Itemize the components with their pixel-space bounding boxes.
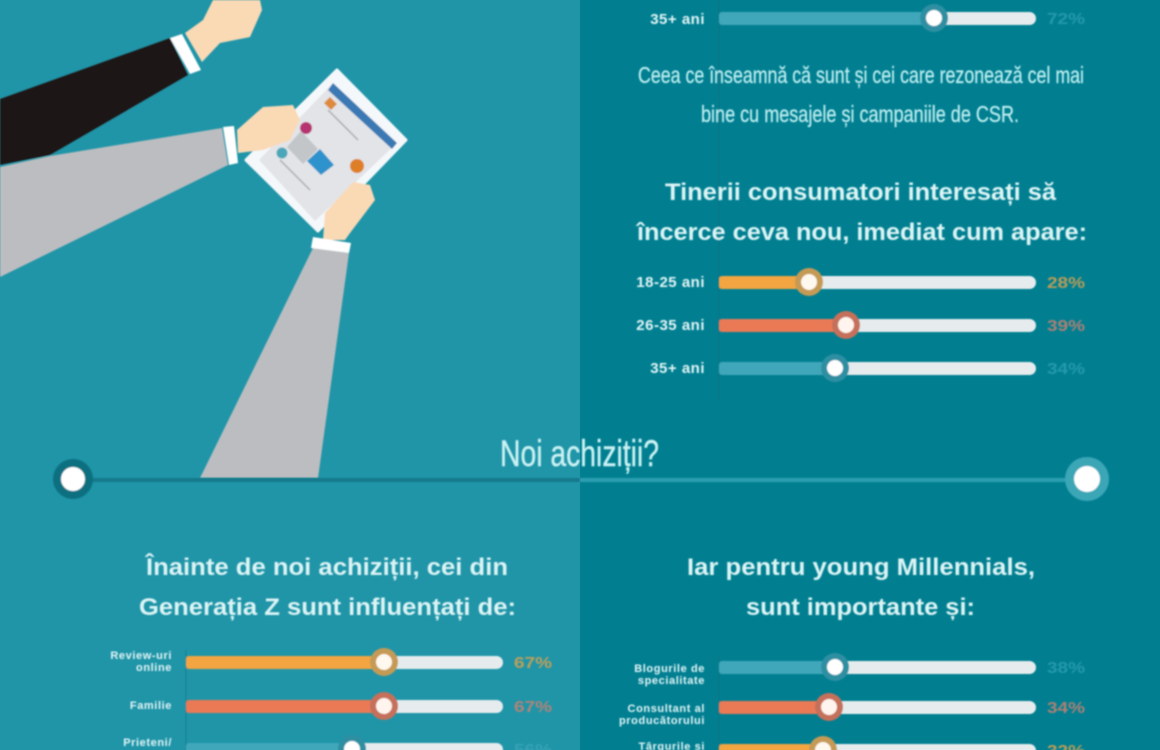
heading: young Millennials: sunt importante și:	[746, 594, 975, 621]
heading: young Millennials	[687, 554, 1035, 621]
bar: Târgurile și 32%	[638, 736, 1085, 750]
bar: 35+ ani 34%: 34%	[1047, 361, 1085, 378]
heading: young consumers: încerce ceva nou, imediat cum apare:	[636, 219, 1087, 246]
illustration: arms holding a tablet	[0, 0, 406, 478]
heading: young consumers	[636, 179, 1087, 246]
lower arm with hand	[200, 182, 375, 478]
bar: Familie 67%: Familie	[130, 700, 172, 712]
bar: 18-25 ani 28%: 28%	[1047, 275, 1085, 292]
section divider: Noi achiziții	[53, 457, 1109, 501]
bar: Review-uri online 67%	[110, 648, 552, 676]
heading: Generația Z	[139, 553, 516, 621]
heading: Generația Z: Generația Z sunt influențați de:	[139, 594, 516, 621]
black sleeve arm	[0, 0, 262, 165]
bar: Prieteni 56%	[123, 735, 552, 750]
bar: Prieteni 56%: Prieteni/	[123, 737, 172, 749]
bar: Consultant al producătorului 34%	[619, 693, 1085, 727]
bar: 35+ ani 34%: 35+ ani	[650, 360, 705, 377]
bar: Consultant al producătorului 34%: 34%	[1047, 700, 1085, 717]
bar: Review-uri online 67%: Review-uri	[110, 650, 172, 662]
right knob	[1065, 457, 1109, 501]
bar: 26-35 ani 39%	[636, 311, 1085, 339]
bar: Blogurile de specialitate 38%	[634, 653, 1085, 687]
bar: Familie 67%: 67%	[514, 699, 552, 716]
bar: 35+ ani 72%: 72%	[1047, 11, 1085, 28]
tablet	[246, 70, 406, 231]
section title: Noi achiziții?	[500, 433, 659, 474]
bar: Consultant al producătorului 34%: producătorului	[619, 715, 705, 727]
bar: 26-35 ani 39%: 39%	[1047, 318, 1085, 335]
bar: 35+ ani 72%: 35+ ani	[650, 11, 705, 28]
bar: 18-25 ani 28%: 18-25 ani	[636, 274, 705, 291]
chart axis: top right	[718, 0, 720, 400]
bar: Familie 67%	[130, 692, 552, 720]
heading: Generația Z: Înainte de noi achiziții, cei din	[145, 553, 508, 581]
grey sleeve arm with hand	[0, 105, 300, 277]
panel: left background	[0, 0, 580, 750]
text: CSR note: bine cu mesajele și campaniile de CSR.	[701, 101, 1019, 127]
left knob	[53, 459, 93, 499]
bar: 18-25 ani 28%	[636, 268, 1085, 296]
bar: Consultant al producătorului 34%: Consultant al	[628, 703, 705, 715]
chart axis: bottom left	[185, 650, 187, 750]
bar: 26-35 ani 39%: 26-35 ani	[636, 317, 705, 334]
bar: Blogurile de specialitate 38%: 38%	[1047, 660, 1085, 677]
heading: young Millennials: Iar pentru young Millennials,	[687, 554, 1035, 581]
chart axis: bottom right	[718, 655, 720, 750]
text: CSR note	[638, 62, 1084, 127]
bar: Blogurile de specialitate 38%: Blogurile de	[634, 663, 705, 675]
bar: Review-uri online 67%: online	[136, 662, 172, 674]
bar: 35+ ani 34%	[650, 354, 1085, 382]
panel: right background	[580, 0, 1160, 750]
bar: 35+ ani 72%	[650, 4, 1085, 32]
bar: Blogurile de specialitate 38%: specialitate	[638, 675, 705, 687]
bar: Review-uri online 67%: 67%	[514, 655, 552, 672]
heading: young consumers: Tinerii consumatori interesați să	[665, 179, 1057, 206]
